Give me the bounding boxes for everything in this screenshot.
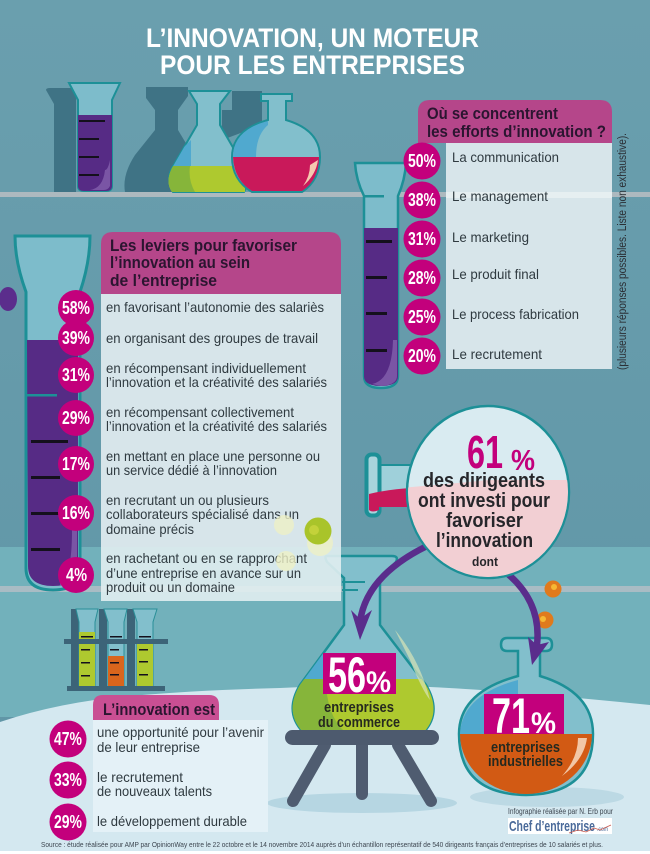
flask body <box>293 556 434 732</box>
percentage badges: leviers <box>58 290 94 593</box>
list text: leviers: produit ou un domaine <box>106 579 235 595</box>
list text: l'innovation est: le recrutement <box>97 769 183 785</box>
percentage badges: l'innovation est: 29% <box>54 812 82 832</box>
text: dirigeants: favoriser <box>446 510 523 532</box>
heading: leviers: l’innovation au sein <box>110 253 250 272</box>
label: industrielles <box>488 739 563 770</box>
percentage badges: l'innovation est: 33% <box>54 770 82 790</box>
percentage badges: leviers: 31% <box>62 365 90 385</box>
value: 56 percent: 56 <box>328 647 366 703</box>
percentage badges: l'innovation est <box>50 720 86 840</box>
list text: leviers: en recrutant un ou plusieurs <box>106 492 269 508</box>
list text: l'innovation est: de leur entreprise <box>97 739 200 755</box>
value: 71 percent: 71 <box>492 688 530 744</box>
value: 61 percent: 61 <box>467 426 503 478</box>
list text: leviers <box>106 299 327 595</box>
list text: leviers: l’innovation et la créativité des salariés <box>106 374 327 390</box>
icon: test tube right <box>355 163 406 388</box>
title <box>146 23 479 80</box>
percentage badges: efforts: 50% <box>408 151 436 171</box>
icon: round flask 71 percent <box>455 638 624 807</box>
list text: leviers: l’innovation et la créativité des salariés <box>106 418 327 434</box>
percentage badges: efforts: 38% <box>408 190 436 210</box>
flask neck <box>366 454 412 516</box>
icon: shelf glassware <box>46 83 320 192</box>
icon: flask 56 percent <box>267 556 457 813</box>
list text: l'innovation est <box>97 724 264 829</box>
text: dirigeants: ont investi pour <box>418 490 550 512</box>
list text: leviers: un service dédié à l’innovation <box>106 462 277 478</box>
list text: efforts: Le recrutement <box>452 346 542 362</box>
percentage badges: leviers: 16% <box>62 503 90 523</box>
panel: efforts d'innovation <box>404 100 612 374</box>
list text: leviers: en organisant des groupes de travail <box>106 330 318 346</box>
percentage badges: efforts: 31% <box>408 229 436 249</box>
label: industrielles: industrielles <box>488 753 563 770</box>
percentage badges: efforts <box>404 142 440 374</box>
text: dirigeants: l’innovation <box>436 530 533 552</box>
heading: l'innovation est: L’innovation est <box>103 700 215 719</box>
title: L’INNOVATION, UN MOTEUR <box>146 23 479 53</box>
label: commerce <box>318 699 400 731</box>
percentage badges: l'innovation est: 47% <box>54 729 82 749</box>
list text: leviers: collaborateurs spécialisé dans un <box>106 506 299 522</box>
list text: efforts: Le marketing <box>452 229 529 245</box>
icon: large test tube left <box>15 236 90 590</box>
percentage badges: efforts: 28% <box>408 268 436 288</box>
label: industrielles: entreprises <box>491 739 560 756</box>
value: 61 percent: % <box>511 445 535 477</box>
list text: efforts <box>452 149 579 362</box>
heading: efforts: Où se concentrent <box>427 104 558 123</box>
panel: leviers <box>58 232 341 601</box>
heading: efforts: les efforts d’innovation ? <box>427 122 606 141</box>
value: 56 percent: % <box>366 666 391 699</box>
list text: leviers: en récompensant collectivement <box>106 404 294 420</box>
percentage badges: leviers: 29% <box>62 408 90 428</box>
list text: l'innovation est: de nouveaux talents <box>97 783 212 799</box>
list text: leviers: domaine précis <box>106 521 194 537</box>
icon: purple bubble <box>0 287 17 311</box>
panel background <box>101 232 341 294</box>
text: dirigeants <box>418 470 550 569</box>
credit and logo: Infographie réalisée par N. Erb pour <box>508 807 613 816</box>
heading: efforts <box>427 104 606 141</box>
list text: leviers: en mettant en place une personne ou <box>106 448 320 464</box>
percentage badges: leviers: 58% <box>62 298 90 318</box>
credit and logo <box>508 807 613 835</box>
heading: leviers: de l’entreprise <box>110 271 217 290</box>
percentage badges: leviers: 4% <box>66 565 87 585</box>
list text: efforts: Le process fabrication <box>452 306 579 322</box>
heading: leviers: Les leviers pour favoriser <box>110 236 297 255</box>
list text: efforts: Le management <box>452 188 548 204</box>
list text: leviers: en rachetant ou en se rapprochant <box>106 550 307 566</box>
icon: green bubbles <box>274 515 333 571</box>
label: commerce: du commerce <box>318 714 400 731</box>
list text: efforts: La communication <box>452 149 559 165</box>
percentage badges: efforts: 25% <box>408 307 436 327</box>
icon: orange bubbles <box>536 580 562 628</box>
list text: l'innovation est: une opportunité pour l’avenir <box>97 724 264 740</box>
flask globe <box>400 406 575 585</box>
arrow: to commerce <box>351 546 427 640</box>
list text: efforts: Le produit final <box>452 266 539 282</box>
value: 71 percent: % <box>531 707 556 740</box>
icon: test tube rack <box>64 609 168 691</box>
title: POUR LES ENTREPRISES <box>160 50 465 80</box>
flask body <box>470 787 624 807</box>
list text: leviers: en récompensant individuellement <box>106 360 306 376</box>
panel background <box>93 695 219 720</box>
panel background <box>418 100 612 143</box>
credit and logo: Chef d’entreprise <box>509 818 595 835</box>
arrow: to industrie <box>503 570 549 665</box>
icon: big round flask 61 percent <box>366 406 575 585</box>
list text: leviers: en favorisant l’autonomie des salariès <box>106 299 324 315</box>
note: vertical: (plusieurs réponses possibles. Liste non exhaustive). <box>617 133 629 370</box>
stand <box>267 730 457 813</box>
panel: l'innovation est <box>50 695 268 840</box>
text: dirigeants: dont <box>472 554 499 569</box>
text: dirigeants: des dirigeants <box>423 470 545 492</box>
percentage badges: leviers: 39% <box>62 328 90 348</box>
percentage badges: leviers: 17% <box>62 454 90 474</box>
label: commerce: entreprises <box>324 699 394 716</box>
list text: leviers: d’une entreprise en avance sur un <box>106 565 301 581</box>
value: 71 percent <box>484 688 564 744</box>
list text: l'innovation est: le développement durable <box>97 813 247 829</box>
percentage badges: efforts: 20% <box>408 346 436 366</box>
heading: leviers <box>110 236 297 290</box>
credit and logo: .com <box>597 827 608 833</box>
